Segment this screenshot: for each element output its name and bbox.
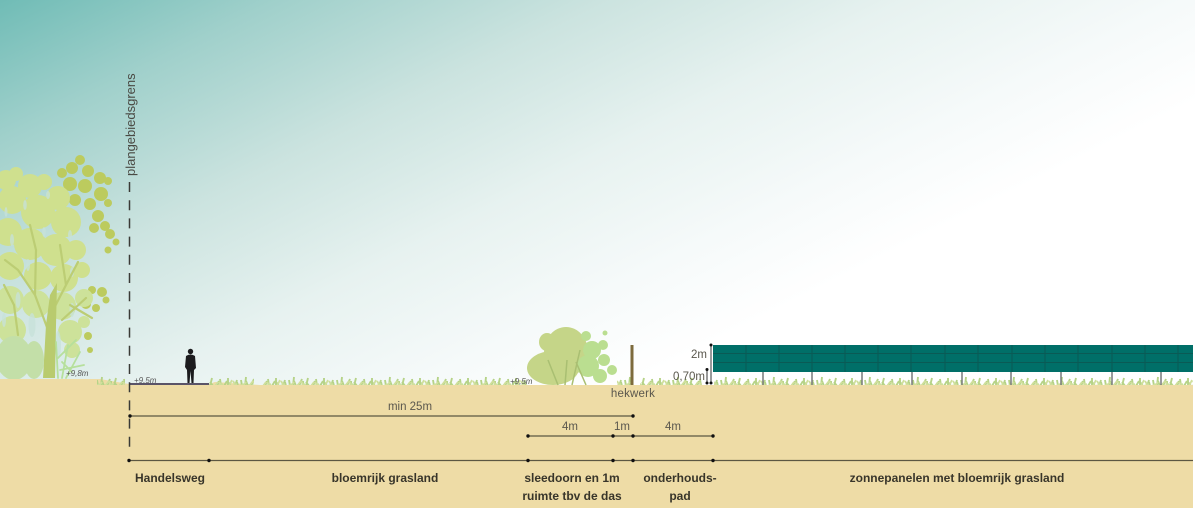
olive crown clusters [57, 155, 120, 353]
fence: hekwerk [630, 345, 634, 385]
tree left [0, 155, 120, 380]
boundary dashed line [128, 182, 130, 450]
zone labels: sleedoorn en 1m [524, 471, 620, 485]
panel height dimensions: 2m [691, 349, 707, 361]
dimension line: 4m 1m 4m: 4m [562, 421, 578, 433]
green lacy part [577, 330, 617, 383]
zone axis line [127, 459, 1193, 462]
person silhouette [185, 349, 196, 383]
elevation labels: +9,5m [134, 376, 157, 385]
dimension line: 4m 1m 4m: 4m [665, 421, 681, 433]
solar panels [713, 345, 1193, 385]
zone labels [135, 471, 1064, 503]
dimension line: 4m 1m 4m [526, 421, 715, 438]
dimension line: min 25m [128, 401, 635, 418]
elevation labels [66, 369, 533, 386]
elevation labels: +9,8m [66, 369, 89, 378]
zone labels: bloemrijk grasland [332, 471, 438, 485]
grass strips [97, 372, 1193, 385]
zone labels: ruimte tbv de das [522, 489, 622, 503]
olive part [527, 327, 588, 385]
light crown [0, 167, 90, 292]
dimension line: min 25m: min 25m [388, 401, 432, 413]
understory shrubs [0, 336, 44, 380]
panel posts [763, 372, 1161, 385]
panel height dimensions [673, 344, 712, 384]
right understory twigs [56, 340, 84, 378]
branches [548, 350, 586, 385]
zone labels: Handelsweg [135, 471, 205, 485]
branches [4, 225, 92, 335]
zone labels: zonnepanelen met bloemrijk grasland [850, 471, 1064, 485]
panel height dimensions: 0,70m [673, 371, 705, 383]
ground [0, 379, 1193, 508]
zone labels: pad [669, 489, 691, 503]
plangebiedsgrens label: plangebiedsgrens [123, 73, 138, 176]
fence label: hekwerk [611, 388, 655, 400]
sky gaps in crown [2, 191, 74, 359]
sky background [0, 0, 1195, 390]
shrub: sleedoorn [527, 327, 617, 385]
road surface [129, 383, 209, 385]
dimension line: 4m 1m 4m: 1m [614, 421, 630, 433]
zone labels: onderhouds- [643, 471, 717, 485]
trunk [43, 283, 57, 378]
elevation labels: +9,5m [510, 377, 533, 386]
